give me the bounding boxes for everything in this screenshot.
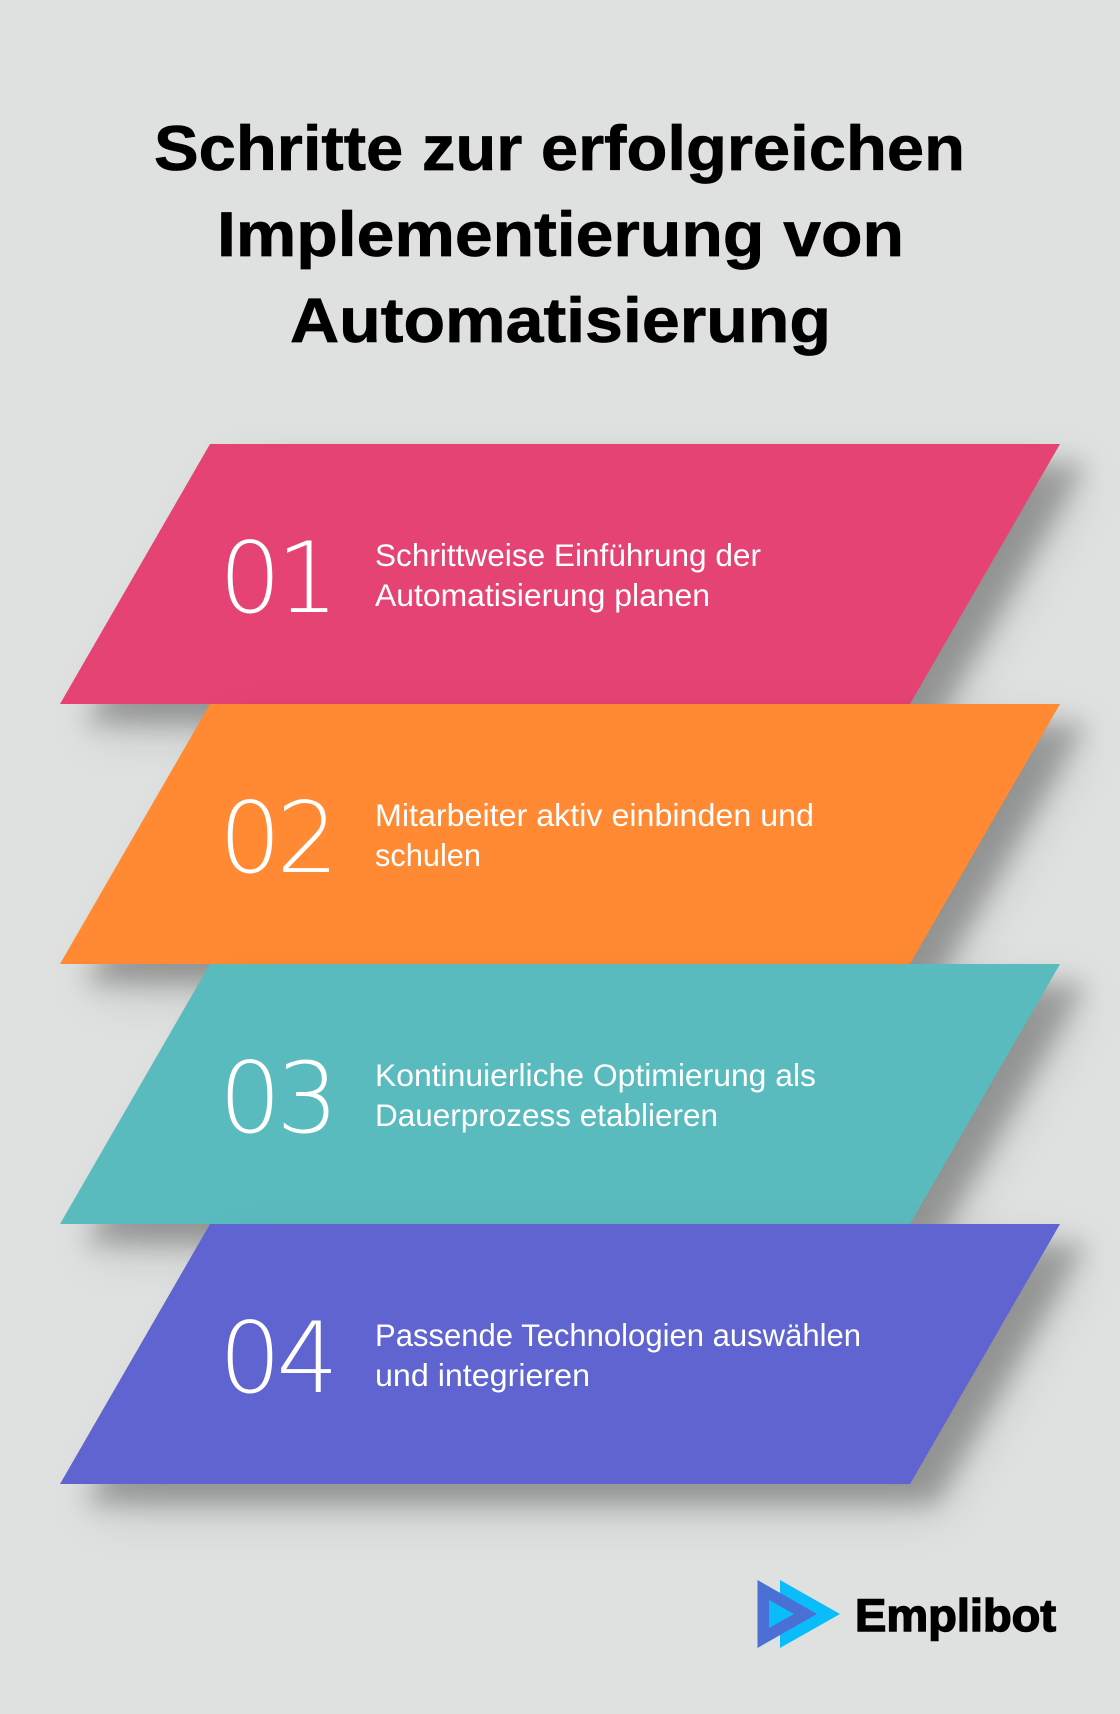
- number 01: 01: [219, 522, 334, 636]
- number 03: 03: [219, 1042, 334, 1156]
- text: step 03: Kontinuierliche Optimierung als: [375, 1057, 816, 1093]
- title: [154, 114, 965, 356]
- number 02: 02: [219, 782, 334, 896]
- title: Schritte zur erfolgreichen: [154, 114, 965, 184]
- title: Automatisierung: [290, 286, 831, 356]
- text: step 02: schulen: [375, 837, 481, 873]
- logo: Emplibot: [758, 1580, 1056, 1648]
- text: step 02: Mitarbeiter aktiv einbinden und: [375, 797, 814, 833]
- text: step 04: Passende Technologien auswählen: [375, 1317, 861, 1353]
- icon: play triangles: [758, 1580, 840, 1648]
- panel: step 01: [60, 444, 1086, 730]
- text: step 03: Dauerprozess etablieren: [375, 1097, 718, 1133]
- panel: step 04: [60, 1224, 1086, 1510]
- text: step 02: [375, 797, 814, 873]
- text: step 04: [375, 1317, 861, 1393]
- panel: step 03: [60, 964, 1086, 1250]
- panel: step 02: [60, 704, 1086, 990]
- text: step 04: und integrieren: [375, 1357, 590, 1393]
- number 04: 04: [219, 1302, 334, 1416]
- title: Implementierung von: [217, 200, 904, 270]
- text: step 01: Schrittweise Einführung der: [375, 537, 761, 573]
- text: step 03: [375, 1057, 816, 1133]
- text: step 01: Automatisierung planen: [375, 577, 710, 613]
- wordmark: Emplibot: [855, 1590, 1056, 1641]
- text: step 01: [375, 537, 761, 613]
